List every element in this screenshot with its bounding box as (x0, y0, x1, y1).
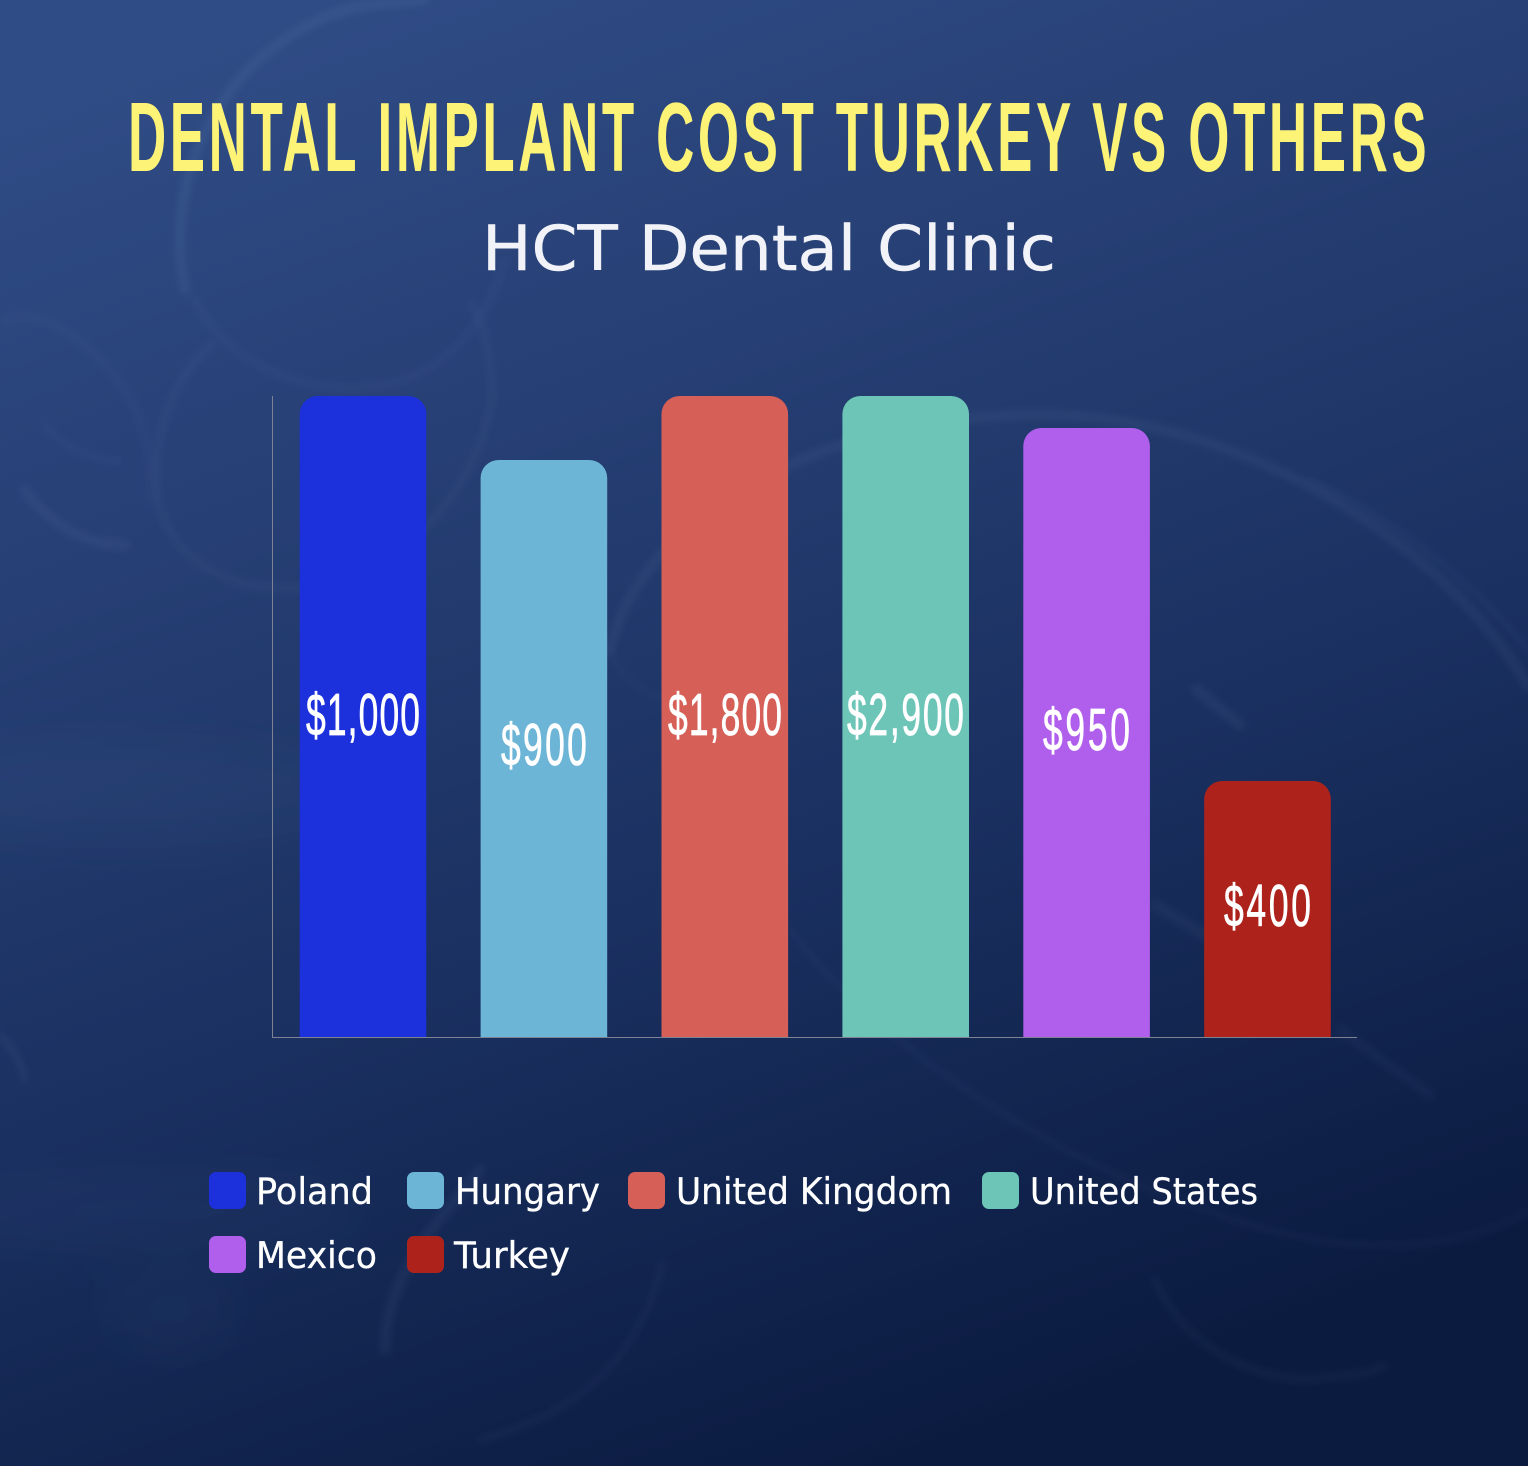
legend: Mexico (209, 1234, 377, 1277)
legend: United Kingdom: United Kingdom (676, 1170, 952, 1213)
bar: Poland (300, 396, 426, 1037)
bar: United Kingdom (662, 396, 788, 1037)
bar: United States: $2,900 (847, 683, 964, 748)
bar: Hungary (481, 460, 607, 1037)
title: DENTAL IMPLANT COST TURKEY VS OTHERS (128, 83, 1427, 192)
subtitle: HCT Dental Clinic (482, 212, 1056, 285)
bar chart (272, 396, 1357, 1038)
legend (209, 1170, 1258, 1277)
legend: Poland: Poland (256, 1170, 373, 1213)
bar: Hungary: $900 (501, 713, 587, 778)
x axis (272, 1036, 1357, 1038)
bar: Mexico (1023, 428, 1150, 1037)
bar: Poland: $1,000 (306, 683, 420, 748)
legend: United States: United States (1030, 1170, 1258, 1213)
legend: Turkey: Turkey (453, 1234, 570, 1277)
bar: Mexico: $950 (1043, 698, 1130, 763)
legend: Poland (209, 1170, 373, 1213)
y axis (272, 396, 274, 1038)
bar: Turkey: $400 (1224, 874, 1311, 939)
legend: Hungary: Hungary (455, 1170, 600, 1213)
legend: Turkey (407, 1234, 570, 1277)
bar: Turkey (1204, 781, 1331, 1037)
legend: Mexico: Mexico (256, 1234, 377, 1277)
bar: United States (842, 396, 969, 1037)
bar: United Kingdom: $1,800 (668, 683, 782, 748)
